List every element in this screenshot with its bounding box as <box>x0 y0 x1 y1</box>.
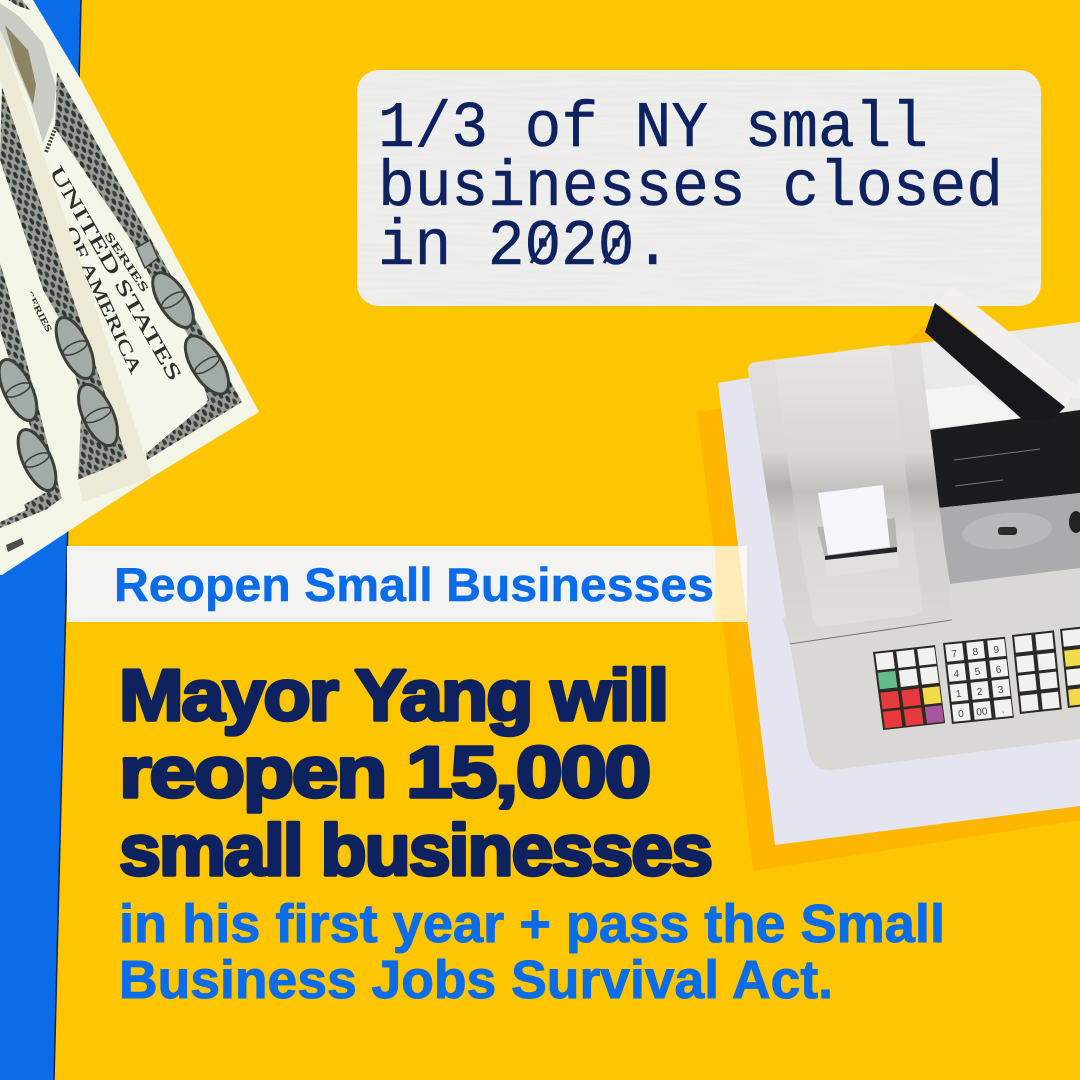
display markings <box>954 449 1040 486</box>
printer cover <box>748 343 952 644</box>
black display <box>930 410 1080 508</box>
keypad: right keys <box>1060 625 1080 708</box>
bill 3 white centre <box>0 504 26 522</box>
bill 1 lettering: UNITED STATES <box>45 162 186 385</box>
register shadow block <box>697 400 1080 871</box>
keypad: blank keys <box>1012 630 1062 714</box>
bill 1 lettering <box>52 164 181 380</box>
bill 1 lettering: OF AMERICA <box>60 223 146 377</box>
switch <box>998 527 1017 535</box>
photo: fan of dollar bills <box>0 0 260 576</box>
bill 1 cream centre <box>146 321 208 453</box>
label band translucent tail <box>715 546 747 622</box>
subheadline: Business Jobs Survival Act. <box>119 950 833 1010</box>
slot lower lip <box>825 551 900 577</box>
keypad: numbers <box>943 637 1014 724</box>
beaded edge <box>46 122 58 152</box>
keypad: numbers: . <box>1001 705 1005 716</box>
bill 2 lettering: SERIES <box>24 289 54 334</box>
register paper sheet <box>718 376 1080 845</box>
receipt slot <box>825 547 897 560</box>
top corner pattern <box>8 0 30 10</box>
keypad: function keys <box>873 645 945 730</box>
slashed zeros <box>531 225 628 263</box>
orange shadow behind bar <box>905 326 935 343</box>
bill 1 lettering: SERIES <box>102 230 151 295</box>
white tray band <box>925 385 1023 428</box>
bill 1 numeral block <box>136 240 158 268</box>
key dial <box>1069 511 1080 533</box>
keypad: numbers: 1 <box>955 689 963 700</box>
band heading: Reopen Small Businesses <box>114 558 714 611</box>
receipt roll <box>818 485 890 555</box>
keypad: numbers: 9 <box>993 645 1000 656</box>
bill 3 numeral ovals <box>0 358 58 492</box>
bottom bill dark mark <box>6 538 24 552</box>
headline: small businesses <box>119 811 711 891</box>
keypad: numbers: 5 <box>974 667 981 678</box>
switch oval <box>961 509 1053 553</box>
bill 2 numeral ovals <box>54 316 119 448</box>
keypad: numbers: 2 <box>976 687 984 698</box>
paper slot housing <box>817 518 897 558</box>
keypad: numbers: 6 <box>995 665 1002 676</box>
body seam <box>790 620 952 644</box>
headline: reopen 15,000 <box>119 733 649 813</box>
bill 2 patterned border <box>0 87 128 480</box>
bill 1 patterned border <box>55 72 242 460</box>
stat card <box>357 70 1041 306</box>
bill 2 cream strip <box>0 30 152 502</box>
keypad: numbers: 4 <box>953 669 960 680</box>
printer inner cover <box>775 345 922 627</box>
keypad: numbers: 00 <box>976 706 989 718</box>
bill 1 numeral ovals <box>151 271 230 396</box>
photo: cash register <box>748 322 1080 770</box>
white label band <box>67 546 715 622</box>
bill 3 cream strip <box>6 284 63 510</box>
keypad: numbers: 0 <box>958 709 965 720</box>
keypad: numbers: 3 <box>997 685 1005 696</box>
card paper texture <box>357 70 1041 306</box>
tilted black and white bar on register <box>925 287 1080 420</box>
stat text: 1/3 of NY small <box>378 92 928 166</box>
keypad: numbers: 7 <box>951 649 958 660</box>
headline <box>119 656 711 891</box>
stat text: businesses closed <box>378 151 1003 225</box>
stat text <box>378 92 1003 284</box>
upper tray <box>920 322 1080 430</box>
blue side stripe <box>0 0 82 1080</box>
gray control panel <box>938 493 1080 584</box>
bill 3 patterned border <box>0 263 63 528</box>
bill 2 cream centre <box>0 160 82 500</box>
register body <box>783 322 1080 770</box>
portrait oval <box>0 3 56 143</box>
subheadline: in his first year + pass the Small <box>119 894 945 954</box>
stat text: in 2020. <box>378 210 671 284</box>
keypad: numbers: 8 <box>972 647 979 658</box>
subheadline <box>119 894 945 1010</box>
portrait hair <box>5 25 36 105</box>
headline: Mayor Yang will <box>119 656 667 736</box>
